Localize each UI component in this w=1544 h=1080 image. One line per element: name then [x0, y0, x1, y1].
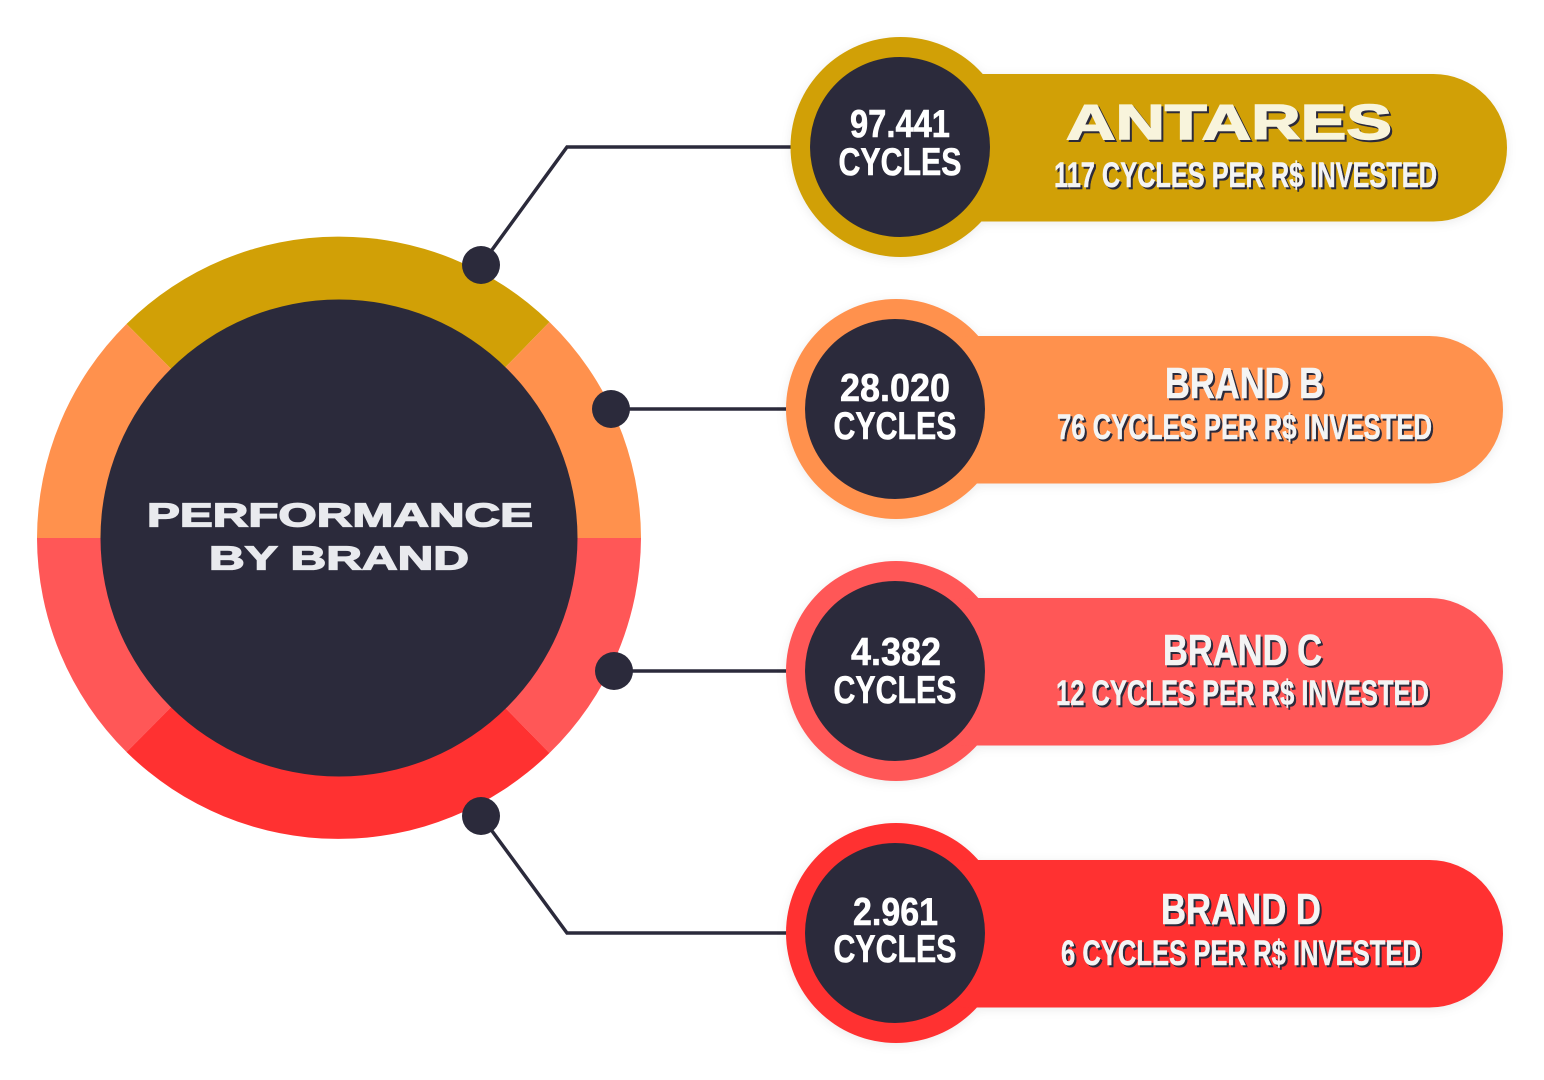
- cycle count: 28.020: [840, 367, 950, 410]
- center circle: [100, 300, 578, 776]
- cycle count: [834, 631, 956, 712]
- brand name: ANTARES: [1066, 96, 1392, 150]
- cycle count: CYCLES: [834, 669, 956, 712]
- cycle count: CYCLES: [834, 405, 956, 448]
- segment: gold: [126, 237, 550, 538]
- connector lines: [481, 147, 795, 933]
- inner circle: [805, 843, 985, 1023]
- cycle count: 2.961: [853, 891, 938, 934]
- brand name: BRAND D: [1161, 885, 1321, 934]
- cycle count: [834, 367, 956, 448]
- brand name: BRAND C: [1163, 626, 1322, 675]
- panel: Brand C: [786, 561, 1503, 781]
- inner circle: [810, 57, 990, 237]
- pill shape: [790, 37, 1507, 257]
- panel: Brand B: [786, 299, 1503, 519]
- panel: Antares: [790, 37, 1507, 257]
- pill shape: [786, 299, 1503, 519]
- pill shape: [786, 823, 1503, 1043]
- donut chart: [37, 237, 641, 839]
- segment: orange: [37, 322, 641, 538]
- cycle count: [834, 891, 956, 971]
- cycle count: CYCLES: [838, 141, 962, 184]
- segment: red: [126, 538, 550, 839]
- pill shape: [786, 561, 1503, 781]
- cycle count: [838, 103, 962, 184]
- cycle count: 97.441: [850, 103, 950, 146]
- chart title: [147, 496, 533, 576]
- chart title: PERFORMANCE: [147, 496, 533, 534]
- segment: light red: [37, 538, 641, 753]
- chart title: BY BRAND: [209, 540, 469, 576]
- cycle count: 4.382: [851, 631, 941, 674]
- inner circle: [805, 319, 985, 499]
- panel: Brand D: [786, 823, 1503, 1043]
- cycle count: CYCLES: [834, 928, 956, 971]
- inner circle: [805, 581, 985, 761]
- cycles per real: 6 CYCLES PER R$ INVESTED: [1061, 934, 1421, 973]
- connector dots: [462, 246, 633, 835]
- brand name: BRAND B: [1165, 359, 1324, 408]
